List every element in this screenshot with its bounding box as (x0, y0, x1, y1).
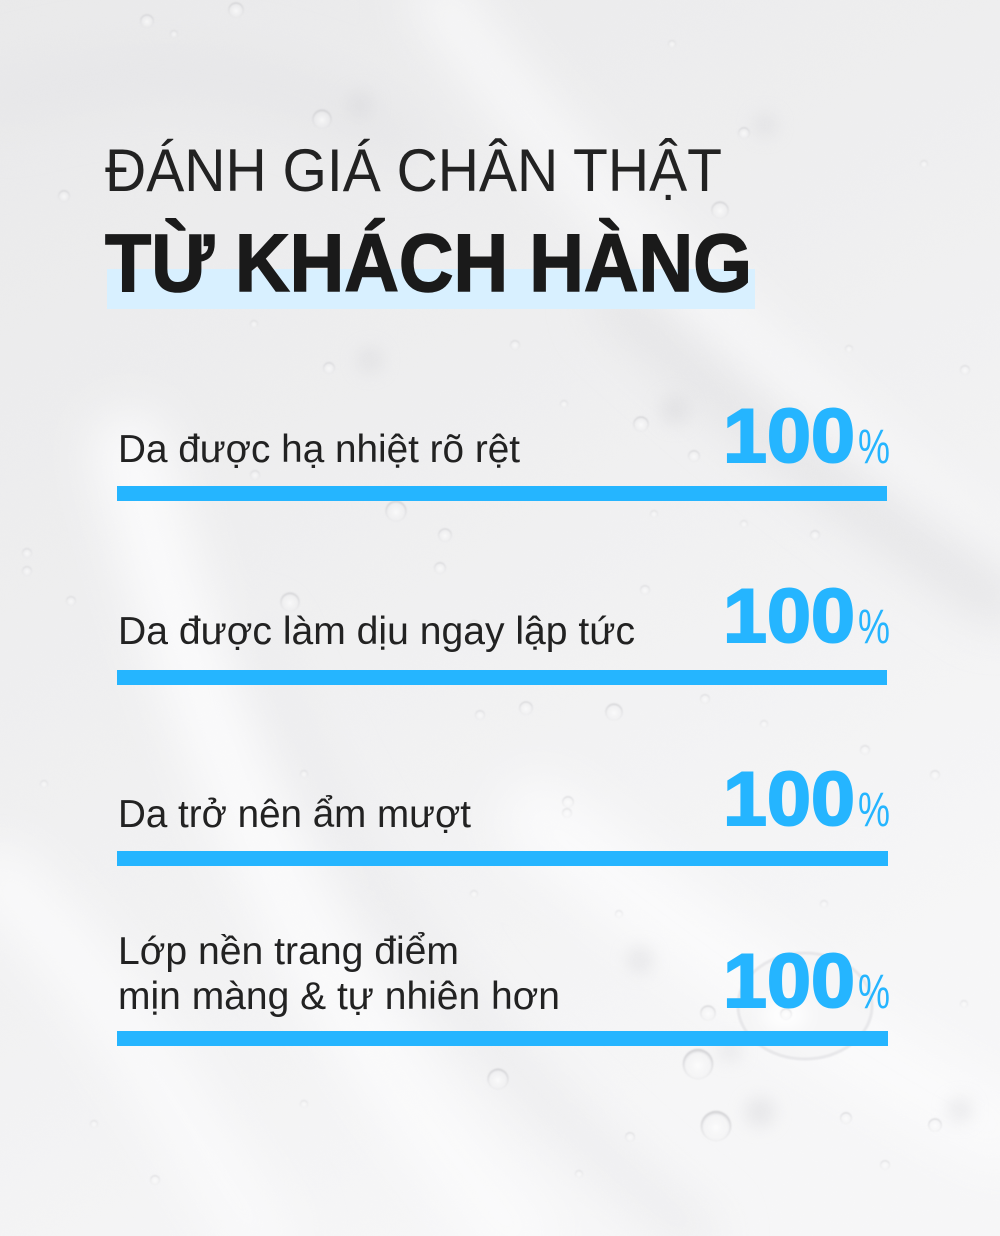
title line 2: TỪ KHÁCH HÀNG (105, 218, 752, 309)
row 3 label: Da trở nên ẩm mượt (118, 793, 471, 836)
row 1 value: 100 (723, 394, 855, 479)
large droplet (738, 953, 872, 1059)
row 3 bar (117, 851, 888, 866)
row 2 label: Da được làm dịu ngay lập tức (118, 610, 635, 653)
title highlight (107, 269, 755, 309)
row 3: smooth (117, 757, 890, 866)
row 2 percent sign: % (858, 601, 890, 654)
row 4: makeup base (117, 930, 890, 1046)
row 4 percent sign: % (858, 966, 890, 1019)
row 2 value: 100 (723, 574, 855, 659)
row 4 bar (117, 1031, 888, 1046)
row 2 bar (117, 670, 887, 685)
row 1: cooling (117, 394, 890, 501)
row 2: soothing (117, 574, 890, 685)
row 4 label line 2: mịn màng & tự nhiên hơn (118, 975, 560, 1018)
row 3 percent sign: % (858, 784, 890, 837)
row 3 value: 100 (723, 757, 855, 842)
row 1 bar (117, 486, 887, 501)
row 1 percent sign: % (858, 421, 890, 474)
title line 1: ĐÁNH GIÁ CHÂN THẬT (105, 137, 722, 204)
row 1 label: Da được hạ nhiệt rõ rệt (118, 428, 520, 471)
row 4 label line 1: Lớp nền trang điểm (118, 930, 459, 973)
row 4 value: 100 (723, 939, 855, 1024)
